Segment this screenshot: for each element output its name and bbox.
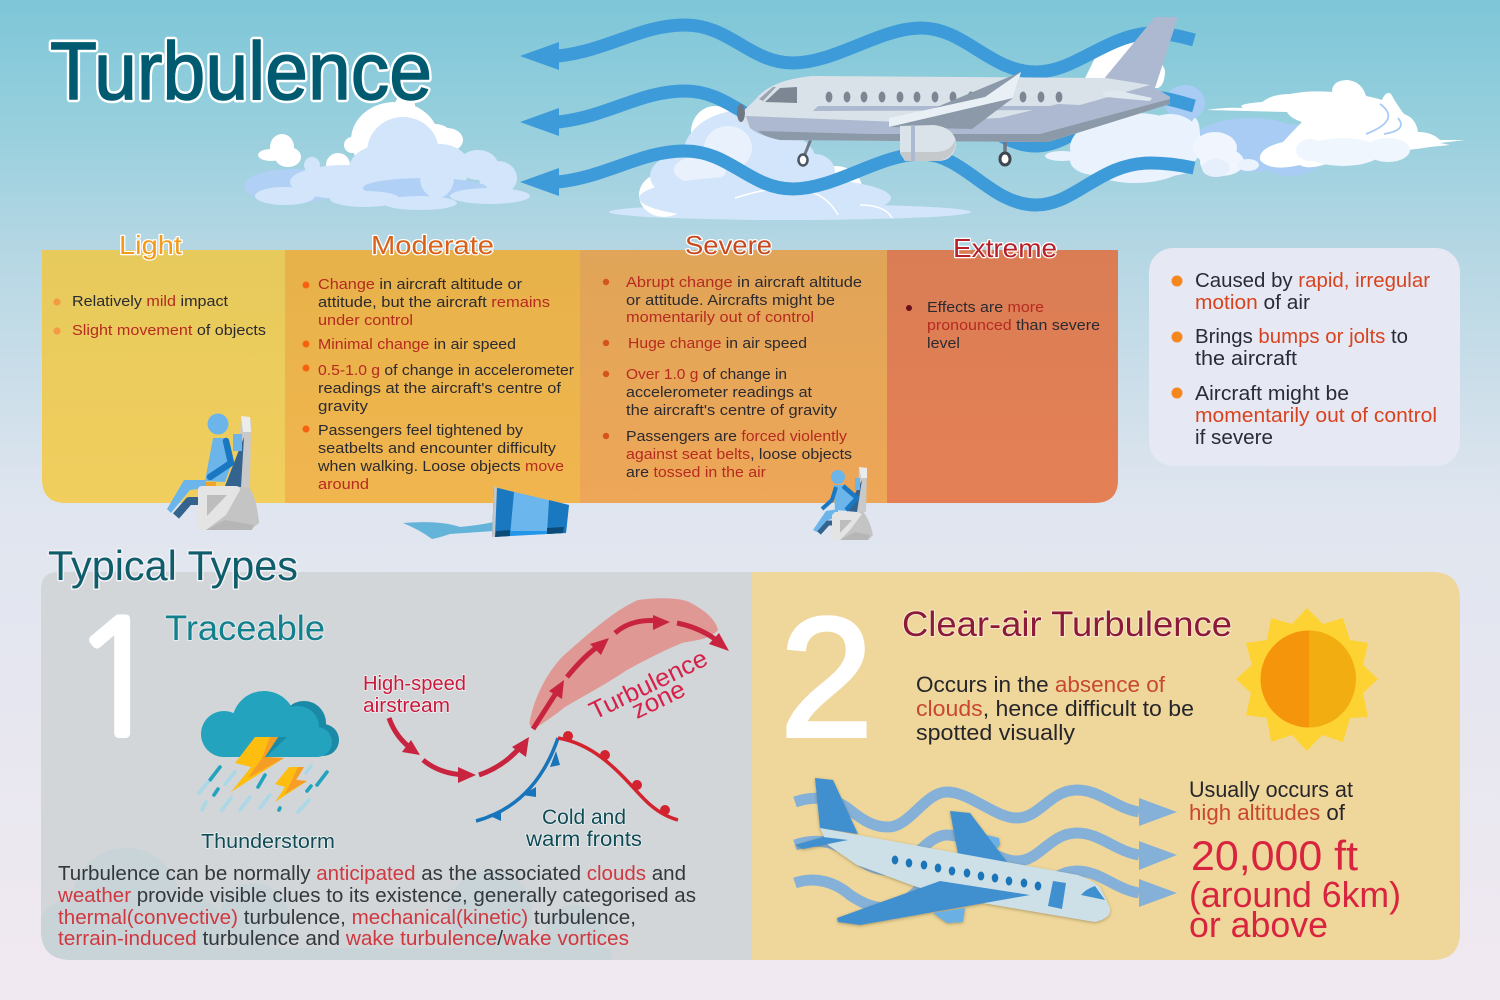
panel: key facts: motion of air	[1195, 292, 1310, 314]
bullets: moderate	[302, 276, 574, 493]
label: turbulence zone: Turbulence	[585, 644, 712, 725]
panel: moderate	[285, 230, 580, 503]
bullets: extreme: pronounced than severe	[927, 317, 1100, 334]
label: fronts: warm fronts	[525, 828, 642, 851]
bullets: moderate: Change in aircraft altitude or	[318, 276, 522, 293]
title: Turbulence	[50, 26, 432, 117]
text block: traceable description: weather provide visible clues to its existence, generally categorised as	[57, 885, 696, 907]
bullets: moderate: seatbelts and encounter difficulty	[318, 440, 557, 457]
text block: clear-air description	[916, 672, 1194, 745]
panel: clear-air turbulence	[752, 572, 1460, 960]
icon: seated passenger light	[167, 414, 259, 530]
bullets: moderate: when walking. Loose objects move	[317, 458, 564, 475]
number: 1: 1	[69, 599, 165, 758]
bullets: light: Slight movement of objects	[72, 322, 266, 339]
bullets: moderate: Passengers feel tightened by	[318, 422, 524, 439]
text block: altitude callout	[1189, 777, 1401, 945]
panel: key facts: Aircraft might be	[1195, 383, 1349, 405]
icon: sun	[1236, 608, 1378, 751]
text block: clear-air description: Occurs in the absence of	[916, 672, 1166, 697]
arrow: wind stream lower	[520, 151, 1194, 205]
bullets: moderate: Minimal change in air speed	[318, 336, 516, 353]
text block: traceable description: Turbulence can be normally anticipated as the associated clouds and	[58, 863, 686, 885]
text block: altitude callout: 20,000 ft	[1191, 832, 1358, 879]
icon: seated passenger severe	[813, 467, 873, 540]
heading: extreme: Extreme	[953, 233, 1057, 263]
icon: thunderstorm cloud	[199, 691, 339, 812]
cloud: right back	[1080, 30, 1465, 176]
label: high-speed airstream: airstream	[363, 695, 450, 717]
label: fronts: Cold and	[542, 806, 626, 829]
bullets: moderate: under control	[318, 312, 413, 329]
bullets: light	[53, 293, 266, 339]
bullets: severe: Over 1.0 g of change in	[626, 366, 787, 383]
heading: light: Light	[119, 230, 183, 260]
text block: altitude callout: or above	[1189, 904, 1328, 945]
panel: key facts: if severe	[1195, 427, 1273, 449]
text block: clear-air description: clouds, hence difficult to be	[916, 696, 1194, 721]
bullets: severe: momentarily out of control	[626, 309, 814, 326]
panel: key facts: the aircraft	[1195, 348, 1297, 370]
panel: light	[42, 230, 285, 503]
illustration: airliner	[737, 17, 1178, 166]
bullets: severe: are tossed in the air	[626, 464, 766, 481]
label: high-speed airstream	[363, 673, 466, 717]
text block: altitude callout: (around 6km)	[1189, 874, 1401, 915]
bullets: severe: Abrupt change in aircraft altitude	[626, 274, 862, 291]
bullets: extreme	[906, 299, 1100, 352]
heading: moderate: Moderate	[371, 230, 494, 260]
panel: severe	[580, 230, 887, 503]
illustration: wind streams right	[795, 790, 1177, 908]
label: thunderstorm: Thunderstorm	[201, 831, 335, 853]
panel: key facts: Brings bumps or jolts to	[1195, 326, 1408, 348]
title: Turbulence	[50, 26, 432, 117]
label: fronts	[525, 806, 642, 851]
bullets: severe: accelerometer readings at	[626, 384, 813, 401]
panel: key facts: momentarily out of control	[1195, 405, 1437, 427]
text block: traceable description: terrain-induced turbulence and wake turbulence /wake vortices	[58, 928, 629, 950]
heading: clear-air turbulence: Clear-air Turbulence	[902, 605, 1232, 644]
text block: altitude callout: high altitudes of	[1189, 800, 1346, 825]
bullets: severe: Passengers are forced violently	[626, 428, 848, 445]
bullets: severe: Huge change in air speed	[628, 335, 807, 352]
panel: extreme	[887, 233, 1118, 503]
bullets: extreme: level	[927, 335, 960, 352]
text block: clear-air description: spotted visually	[916, 720, 1075, 745]
illustration: blue aeroplane	[795, 778, 1110, 925]
heading: traceable: Traceable	[165, 609, 325, 648]
icon: tipped cup	[403, 487, 569, 539]
bullets: moderate: readings at the aircraft's centre of	[318, 380, 562, 397]
panel: key facts	[1149, 248, 1460, 466]
bullets: severe: against seat belts , loose objects	[626, 446, 852, 463]
bullets: severe	[603, 274, 862, 481]
panel: traceable	[36, 572, 752, 971]
cloud: right front	[1045, 113, 1259, 183]
bullets: moderate: attitude, but the aircraft remains	[318, 294, 550, 311]
cloud: centre behind plane	[609, 106, 971, 220]
number: 2: 2	[780, 583, 873, 773]
bullets: light: Relatively mild impact	[72, 293, 229, 310]
arrows: airstream	[389, 615, 729, 783]
text block: traceable description	[57, 863, 696, 950]
text block: altitude callout: Usually occurs at	[1189, 777, 1353, 802]
text block: traceable description: thermal(convective) turbulence, mechanical(kinetic) turbulence,	[58, 907, 636, 929]
icon: cold and warm fronts	[476, 731, 678, 821]
bullets: severe: or attitude. Aircrafts might be	[626, 292, 835, 309]
heading: severe: Severe	[685, 230, 772, 260]
label: high-speed airstream: High-speed	[363, 673, 466, 695]
bullets: moderate: around	[318, 476, 369, 493]
heading: typical types: Typical Types	[48, 542, 298, 589]
cloud: left	[244, 95, 530, 210]
label: turbulence zone: zone	[627, 675, 690, 725]
panel: key facts: Caused by rapid, irregular	[1195, 270, 1430, 292]
bullets: severe: the aircraft's centre of gravity	[626, 402, 838, 419]
bullets: extreme: Effects are more	[927, 299, 1044, 316]
bullets: moderate: gravity	[318, 398, 369, 415]
arrows: wind streams upper	[520, 25, 1194, 146]
bullets: moderate: 0.5-1.0 g of change in accelerometer	[318, 362, 574, 379]
shape: turbulence zone	[530, 598, 718, 729]
